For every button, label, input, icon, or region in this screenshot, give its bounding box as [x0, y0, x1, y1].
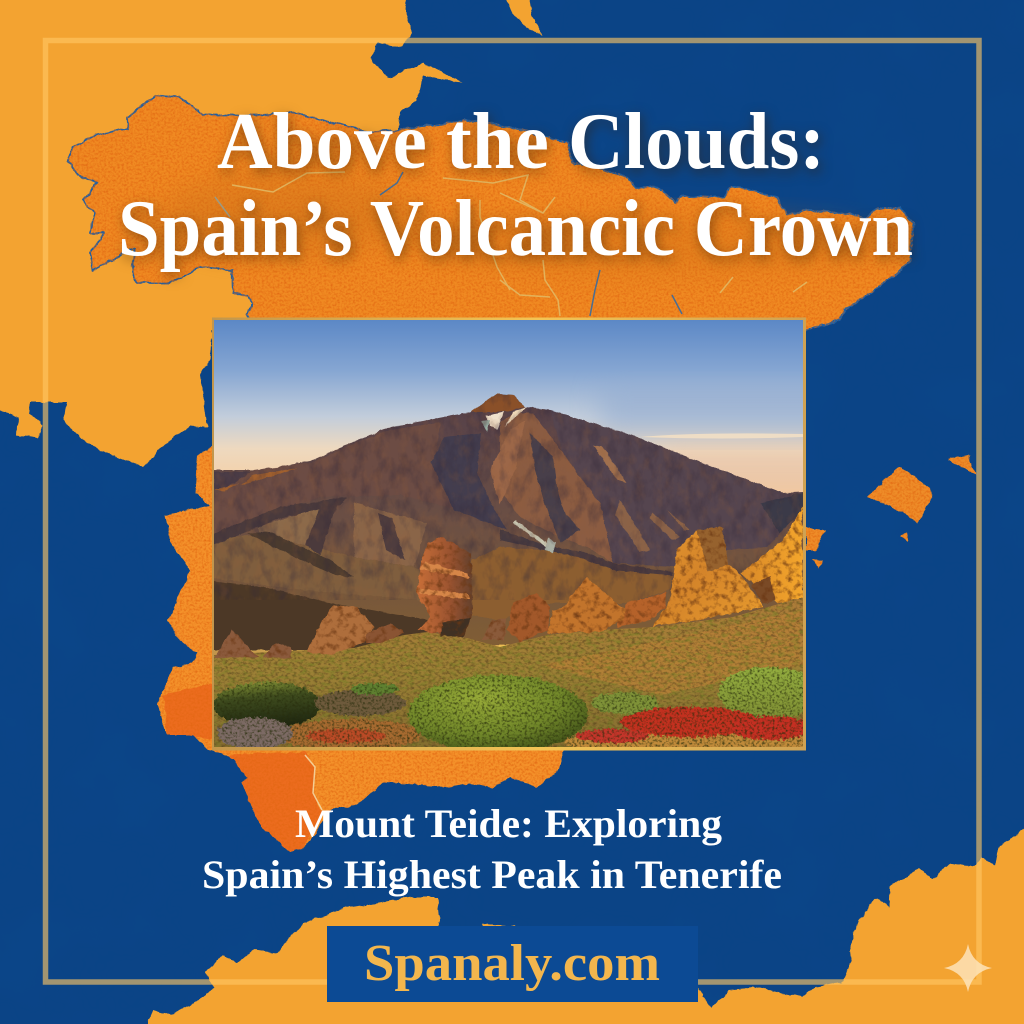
land: orange northern Spain: [68, 95, 913, 400]
title: [118, 98, 913, 273]
land: bottom yellow coast: [140, 815, 1024, 1024]
title line 2: Spain’s Volcancic Crown: [118, 185, 913, 273]
website text: Spanaly.com: [364, 935, 660, 992]
rock: left: [307, 605, 374, 655]
dark shadowed plain: [205, 580, 430, 650]
website banner: [327, 926, 698, 1002]
land: Balearic islands: [806, 455, 976, 568]
subtitle line 2: Spain’s Highest Peak in Tenerife: [202, 852, 782, 897]
dark shadow right: [760, 493, 803, 533]
mountain texture: [214, 390, 803, 600]
summit cap: [471, 394, 525, 412]
dark ridge shadows: [214, 497, 347, 545]
land: red-orange patch west: [163, 683, 214, 740]
plants: dry tan foreground: [280, 719, 420, 751]
rock formations: [214, 507, 803, 658]
shading on Spain behind title: [160, 175, 880, 275]
snow patches: [486, 412, 504, 430]
rock: right large: [653, 527, 763, 626]
central dark gully: [431, 433, 507, 530]
rock: central pillar: [416, 537, 473, 637]
left low shoulder: [214, 471, 250, 490]
left flank upper: [230, 422, 440, 485]
lit streaks on right face: [593, 445, 627, 483]
bush: right green: [717, 666, 803, 718]
vegetation: [214, 666, 803, 747]
mid lit ridges: [257, 510, 320, 545]
land: northwest yellow region: [0, 0, 463, 467]
land: orange southern Spain: [157, 445, 600, 852]
subtitle line 1: Mount Teide: Exploring: [295, 801, 722, 846]
bush: small mid: [591, 692, 659, 714]
photo gold border: [212, 318, 806, 750]
distant cloud streak: [640, 433, 803, 438]
rock: mid group: [617, 592, 667, 627]
plants: lavender grey: [217, 717, 293, 749]
bush: left dark green: [213, 682, 321, 728]
bush: centre green: [408, 675, 588, 753]
title line 1: Above the Clouds:: [217, 98, 825, 186]
central lit ridge: [500, 413, 613, 563]
land: red-orange patch south: [227, 752, 322, 852]
photo: Mount Teide landscape: [212, 318, 806, 750]
land: top small cape: [503, 0, 542, 36]
dark band below cone: [575, 550, 673, 576]
red plants: left: [305, 729, 385, 743]
red shrubs: right: [620, 707, 760, 737]
subtitle: [202, 801, 782, 897]
right shaded face: [550, 410, 803, 567]
lower apron: [470, 547, 673, 620]
ground slope: [214, 595, 803, 750]
mountain: [205, 390, 810, 650]
sky: [214, 320, 803, 494]
icon: four-point sparkle: [944, 944, 992, 992]
map: rivers: [215, 172, 807, 810]
rock: far right: [740, 507, 803, 603]
